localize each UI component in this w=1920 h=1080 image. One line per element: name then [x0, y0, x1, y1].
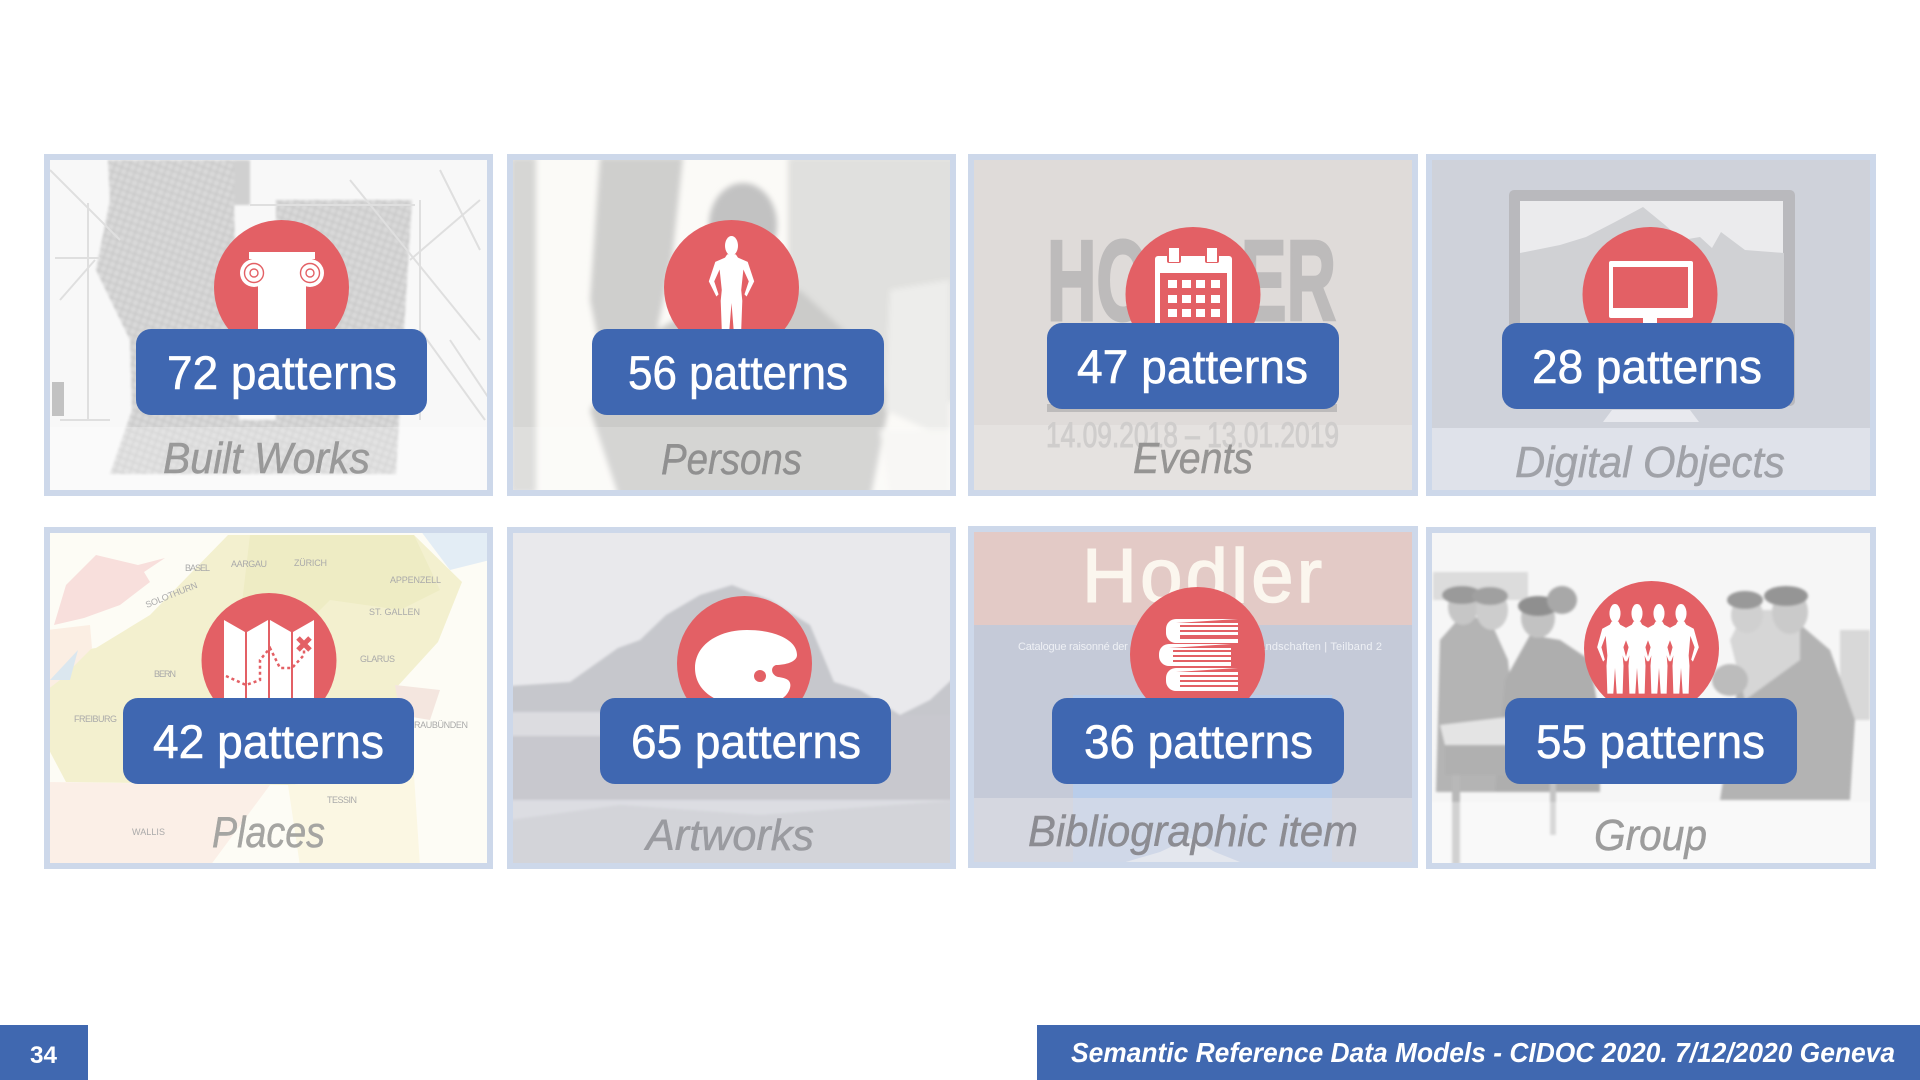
count badge — [1505, 698, 1797, 784]
exhibition poster background: HODLER — [1047, 218, 1336, 345]
red circle — [202, 593, 336, 728]
red circle — [1130, 587, 1265, 722]
label: Artworks — [643, 811, 814, 860]
count badge: 72 patterns — [167, 346, 397, 399]
map background: ST. GALLEN — [369, 607, 420, 617]
page number: 34 — [30, 1042, 58, 1069]
count badge — [123, 698, 414, 784]
icon: group of people — [1597, 604, 1699, 694]
count badge: 28 patterns — [1532, 340, 1762, 393]
count badge — [1047, 323, 1339, 409]
count badge: 47 patterns — [1077, 340, 1308, 393]
count badge — [1052, 698, 1344, 784]
map background: RAUBÜNDEN — [414, 720, 468, 730]
map background: GLARUS — [360, 654, 395, 664]
red circle — [1584, 581, 1719, 716]
book cover background: Catalogue raisonné der Gemälde | Die — [1018, 641, 1198, 653]
panel frame — [47, 530, 490, 866]
map background: AARGAU — [231, 559, 267, 569]
red circle — [214, 220, 349, 355]
map background: WALLIS — [132, 827, 165, 837]
book cover background: Landschaften | Teilband 2 — [1253, 641, 1382, 653]
label: Bibliographic item — [1028, 807, 1358, 856]
panel: Artworks — [510, 530, 960, 870]
footer banner: Semantic Reference Data Models - CIDOC 2020. 7/12/2020 Geneva — [1071, 1037, 1895, 1068]
footer banner — [1037, 1025, 1920, 1080]
monitor with mountain background — [1429, 190, 1873, 493]
map background: BERN — [154, 669, 176, 679]
exhibition poster background: 14.09.2018 – 13.01.2019 — [1046, 416, 1339, 455]
count badge: 36 patterns — [1084, 715, 1313, 768]
panel frame — [1429, 530, 1873, 866]
count badge — [1502, 323, 1794, 409]
label: Digital Objects — [1515, 438, 1785, 487]
label: Places — [212, 808, 325, 857]
book cover background: Hodler — [1082, 534, 1322, 619]
panel frame — [47, 157, 490, 493]
portrait photo background — [510, 157, 958, 500]
group photo background — [1429, 572, 1873, 866]
count badge: 55 patterns — [1536, 715, 1765, 768]
map background: TESSIN — [327, 795, 357, 805]
map background — [47, 530, 490, 866]
label: Built Works — [163, 434, 370, 483]
panel: Persons — [510, 157, 958, 500]
panel frame — [971, 157, 1415, 493]
count badge — [600, 698, 891, 784]
count badge: 42 patterns — [153, 715, 384, 768]
panel frame — [510, 157, 953, 493]
map background: ZÜRICH — [294, 558, 327, 568]
map background: SOLOTHURN — [144, 580, 199, 610]
panel: Places — [47, 530, 490, 866]
red circle — [1582, 227, 1718, 362]
count badge — [136, 329, 427, 415]
icon: folded map — [224, 620, 314, 700]
red circle — [677, 596, 812, 731]
panel frame — [510, 530, 953, 866]
panel: Group — [1429, 530, 1873, 866]
icon: calendar — [1155, 247, 1232, 326]
icon: monitor — [1609, 261, 1693, 325]
map background: BASEL — [185, 563, 210, 573]
panel: Built Works — [47, 157, 490, 493]
panel frame — [1429, 157, 1873, 493]
panel: Digital Objects — [1429, 157, 1873, 493]
panel: Events — [971, 157, 1415, 493]
book cover background — [971, 529, 1415, 866]
map background: FREIBURG — [74, 714, 117, 724]
red circle — [1126, 227, 1260, 362]
label: Persons — [661, 435, 802, 484]
page number — [0, 1025, 88, 1080]
mountain painting background — [510, 585, 960, 870]
map background: APPENZELL — [390, 575, 441, 585]
icon: stack of books — [1159, 619, 1238, 691]
exhibition poster background — [1047, 238, 1338, 448]
icon: painter palette — [695, 630, 797, 705]
label: Group — [1594, 811, 1707, 860]
count badge — [592, 329, 884, 415]
label: Events — [1133, 434, 1253, 483]
panel: Bibliographic item — [971, 529, 1415, 866]
red circle — [664, 220, 799, 355]
sketch background — [50, 160, 490, 474]
count badge: 65 patterns — [631, 715, 861, 768]
panel frame — [971, 529, 1415, 865]
icon: person — [709, 236, 754, 330]
count badge: 56 patterns — [628, 346, 848, 399]
icon: ionic column — [240, 252, 324, 332]
